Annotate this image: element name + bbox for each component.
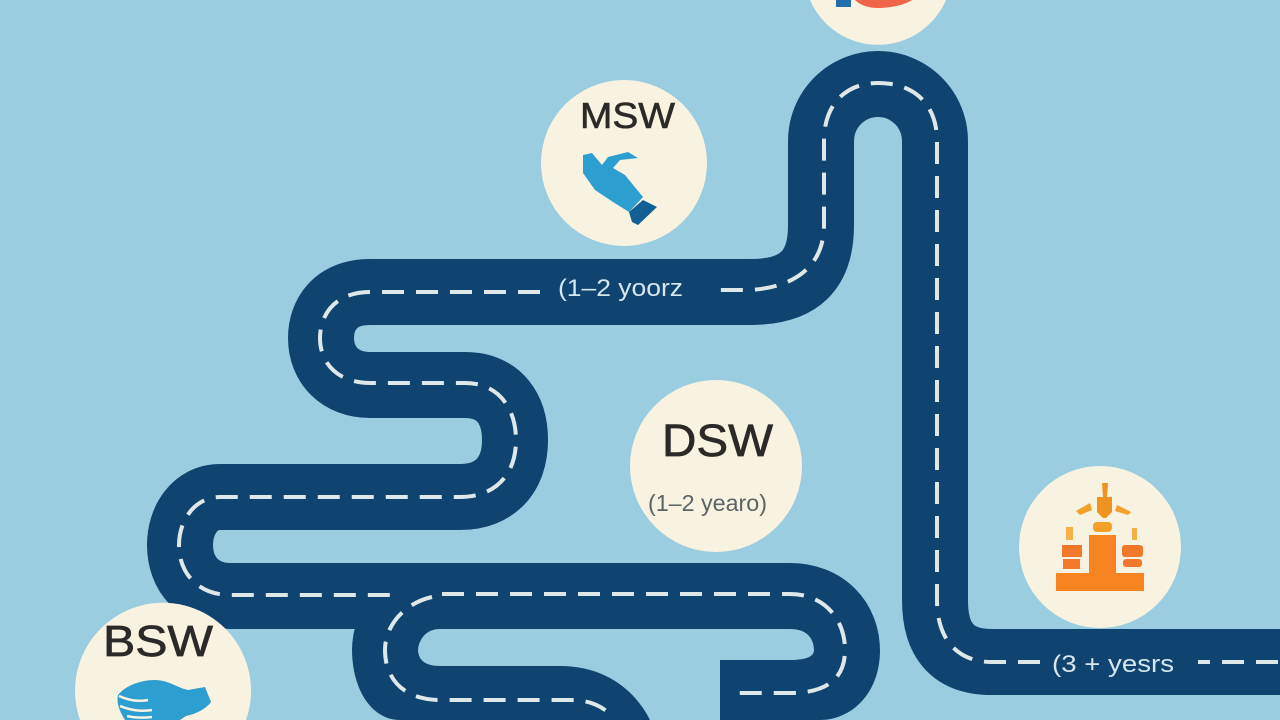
heading: BSW: BSW: [103, 617, 214, 666]
road label: doctoral duration: (3 + yesrs: [1052, 651, 1174, 678]
circle: DSW: [630, 380, 802, 552]
circle: top milestone, partly cropped: [810, 0, 946, 45]
heading: DSW: DSW: [662, 415, 774, 466]
icon: blue hand with stripes: [117, 680, 211, 720]
circle: orange milestone: [1019, 466, 1181, 628]
road centre dashes: [179, 83, 1278, 716]
circle: MSW: [541, 80, 707, 246]
circle: BSW: [75, 603, 251, 720]
heading: MSW: MSW: [580, 95, 675, 136]
icon: top milestone fragment: [836, 0, 912, 8]
icon: orange monument: [1056, 483, 1144, 591]
winding road: [180, 84, 1280, 720]
icon: blue hand: [583, 152, 657, 225]
road label: MSW duration: (1–2 yoorz: [558, 275, 683, 302]
duration: DSW: (1–2 yearo): [648, 490, 767, 516]
